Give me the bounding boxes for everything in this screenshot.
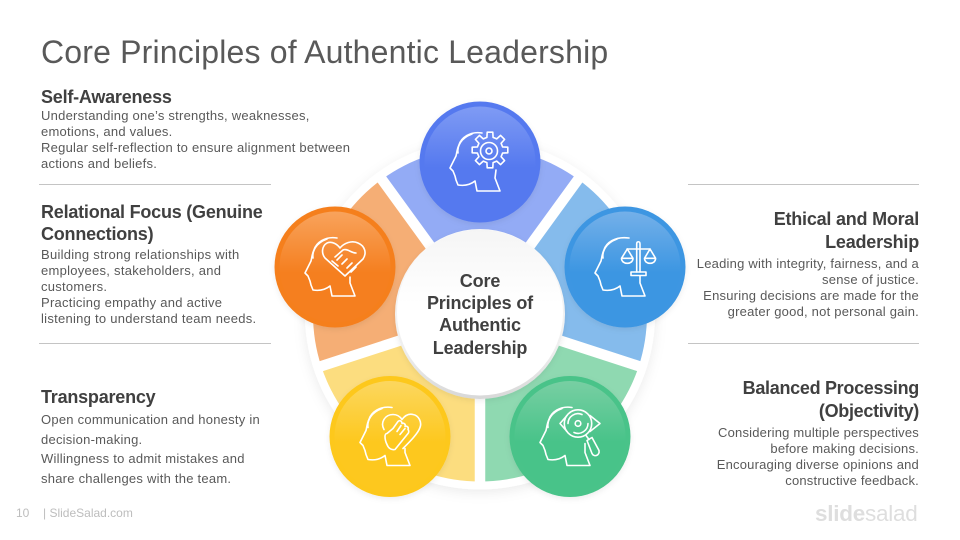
icon: transparency head with heart and hand bbox=[330, 376, 450, 497]
text block: relational focus: customers. bbox=[41, 279, 107, 294]
text block: balanced processing bbox=[717, 378, 919, 488]
text block: relational focus bbox=[41, 202, 263, 326]
icon: balanced processing head with magnifier bbox=[510, 376, 630, 497]
text block: ethical and moral leadership: Ensuring decisions are made for the bbox=[703, 288, 919, 303]
text block: ethical and moral leadership: sense of justice. bbox=[822, 272, 919, 287]
icon: ethical head with scales bbox=[564, 206, 686, 328]
text block: relational focus: employees, stakeholders, and bbox=[41, 263, 221, 278]
footer source: | SlideSalad.com bbox=[43, 506, 133, 520]
text block: self-awareness bbox=[41, 87, 350, 171]
segment: bottom yellow bbox=[321, 314, 480, 482]
segment: bottom green bbox=[480, 314, 639, 482]
text block: ethical and moral leadership: Leading with integrity, fairness, and a bbox=[697, 256, 919, 271]
text block: transparency: Transparency bbox=[41, 387, 155, 407]
segment: top blue bbox=[382, 147, 578, 314]
page number: 10 bbox=[16, 506, 29, 520]
segment: left orange bbox=[313, 179, 480, 366]
text block: relational focus: Practicing empathy and active bbox=[41, 295, 222, 310]
text block: self-awareness: actions and beliefs. bbox=[41, 156, 157, 171]
text block: relational focus: listening to understand team needs. bbox=[41, 311, 256, 326]
text block: relational focus: Building strong relationships with bbox=[41, 247, 240, 262]
text block: ethical and moral leadership: Ethical and Moral bbox=[774, 209, 919, 229]
text block: ethical and moral leadership bbox=[697, 209, 919, 319]
text block: self-awareness: Regular self-reflection to ensure alignment between bbox=[41, 140, 350, 155]
text block: balanced processing: (Objectivity) bbox=[819, 401, 919, 421]
text block: balanced processing: Considering multiple perspectives bbox=[718, 425, 919, 440]
text block: ethical and moral leadership: Leadership bbox=[825, 232, 919, 252]
text block: relational focus: Relational Focus (Genuine bbox=[41, 202, 263, 222]
title: Core Principles of Authentic Leadership bbox=[41, 34, 608, 70]
text block: transparency: share challenges with the team. bbox=[41, 470, 231, 486]
outer white disc bbox=[305, 140, 655, 490]
text block: transparency bbox=[41, 387, 260, 486]
text block: balanced processing: Encouraging diverse opinions and bbox=[717, 457, 919, 472]
text block: transparency: Willingness to admit mistakes and bbox=[41, 451, 245, 466]
text block: balanced processing: constructive feedback. bbox=[785, 473, 919, 488]
center label: Leadership bbox=[433, 338, 527, 358]
text block: self-awareness: Understanding one’s strengths, weaknesses, bbox=[41, 108, 310, 123]
logo: slidesalad bbox=[815, 501, 918, 526]
text block: transparency: decision-making. bbox=[41, 432, 142, 446]
text block: balanced processing: before making decisions. bbox=[770, 441, 919, 456]
text block: relational focus: Connections) bbox=[41, 224, 153, 244]
center label: Authentic bbox=[439, 315, 521, 335]
text block: transparency: Open communication and honesty in bbox=[41, 412, 260, 427]
text block: self-awareness: emotions, and values. bbox=[41, 124, 173, 139]
center circle bbox=[395, 229, 565, 399]
segment: right light blue bbox=[480, 179, 647, 366]
center label: Core bbox=[460, 271, 500, 291]
icon: self-awareness head with gear bbox=[420, 102, 540, 222]
icon: relational head with heart handshake bbox=[274, 206, 396, 328]
text block: ethical and moral leadership: greater good, not personal gain. bbox=[728, 304, 919, 319]
text block: balanced processing: Balanced Processing bbox=[743, 378, 919, 398]
text block: self-awareness: Self-Awareness bbox=[41, 87, 172, 107]
center label: Principles of bbox=[427, 293, 534, 313]
